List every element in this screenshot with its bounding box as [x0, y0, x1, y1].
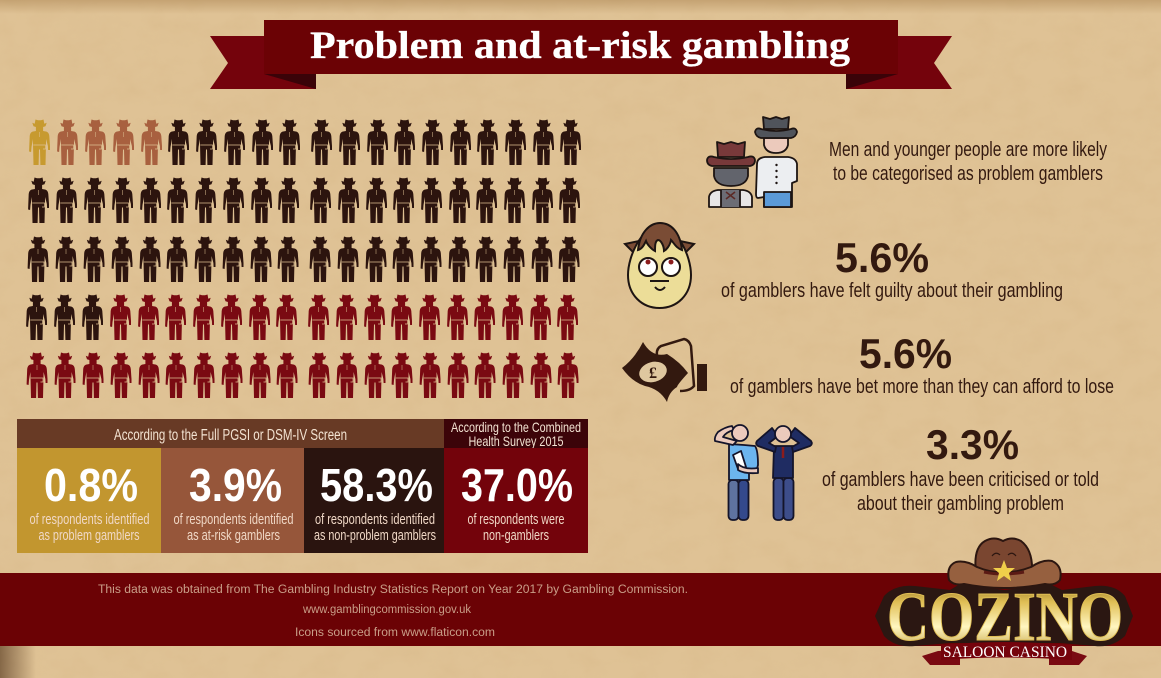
- cell: at-risk gamblers: of respondents identified: [174, 512, 294, 528]
- stat: bet more: 5.6%: [859, 330, 952, 377]
- cell: problem gamblers: of respondents identified: [30, 512, 150, 528]
- pictogram: 100 cowboys: [26, 120, 581, 398]
- footer text: data source: This data was obtained from The Gambling Industry Statistics Report on Year 2017 by Gambling Commission.: [98, 584, 688, 596]
- icon: money in hand: [622, 339, 707, 402]
- text: men and younger people: [829, 139, 1107, 185]
- footer band: [0, 573, 1161, 646]
- cell: problem gamblers: [17, 448, 161, 553]
- cell: non-problem gamblers: as non-problem gamblers: [314, 528, 436, 544]
- cell: non-problem gamblers: 58.3%: [320, 459, 433, 511]
- row 3: [28, 236, 580, 282]
- cell: non-problem gamblers: [304, 448, 444, 553]
- stat: guilty: 5.6%: [835, 234, 929, 281]
- icon: two cowboys: [707, 117, 797, 207]
- row 5: [27, 352, 579, 398]
- footer text: website: www.gamblingcommission.gov.uk: [302, 604, 471, 616]
- logo plate: [875, 584, 1133, 646]
- row 2: [28, 178, 580, 223]
- header: Combined Health Survey: Health Survey 2015: [468, 433, 564, 449]
- statistics table: [17, 419, 588, 553]
- cell: non-gamblers: non-gamblers: [483, 528, 549, 544]
- icon: money in hand: £: [649, 365, 657, 382]
- header: Combined Health Survey: [444, 419, 588, 449]
- header: PGSI: According to the Full PGSI or DSM-IV Screen: [114, 427, 347, 444]
- title: Problem and at-risk gambling: [310, 24, 851, 67]
- stat: guilty: of gamblers have felt guilty about their gambling: [721, 280, 1063, 302]
- cell: problem gamblers: 0.8%: [44, 459, 138, 511]
- cell: non-problem gamblers: of respondents identified: [315, 512, 435, 528]
- row 1: [29, 120, 581, 165]
- title banner: [210, 20, 952, 89]
- cell: problem gamblers: as problem gamblers: [38, 528, 140, 544]
- logo ribbon: SALOON CASINO: [943, 644, 1067, 661]
- row 4: [26, 294, 578, 340]
- cell: non-gamblers: of respondents were: [468, 512, 564, 528]
- logo: Cozino Saloon Casino: [875, 538, 1133, 665]
- header: PGSI: [17, 419, 444, 448]
- header: Combined Health Survey: According to the Combined: [451, 419, 581, 435]
- stat: criticised: [822, 421, 1099, 515]
- icon: two worried men: [715, 425, 812, 520]
- cell: non-gamblers: [444, 448, 588, 553]
- stat: criticised: 3.3%: [926, 421, 1019, 468]
- stat: guilty: [721, 234, 1063, 302]
- logo hat: [948, 538, 1061, 588]
- stat: criticised: of gamblers have been criticised or told: [822, 469, 1099, 491]
- footer text: icons credit: Icons sourced from www.flaticon.com: [295, 627, 495, 639]
- cell: at-risk gamblers: as at-risk gamblers: [187, 528, 280, 544]
- icon: guilty egg face: [625, 223, 694, 308]
- logo ribbon: [922, 642, 1087, 665]
- cell: at-risk gamblers: [161, 448, 304, 553]
- cell: at-risk gamblers: 3.9%: [189, 459, 282, 511]
- stat: criticised: about their gambling problem: [857, 493, 1064, 515]
- stat: bet more: [730, 330, 1114, 398]
- cell: non-gamblers: 37.0%: [461, 459, 573, 511]
